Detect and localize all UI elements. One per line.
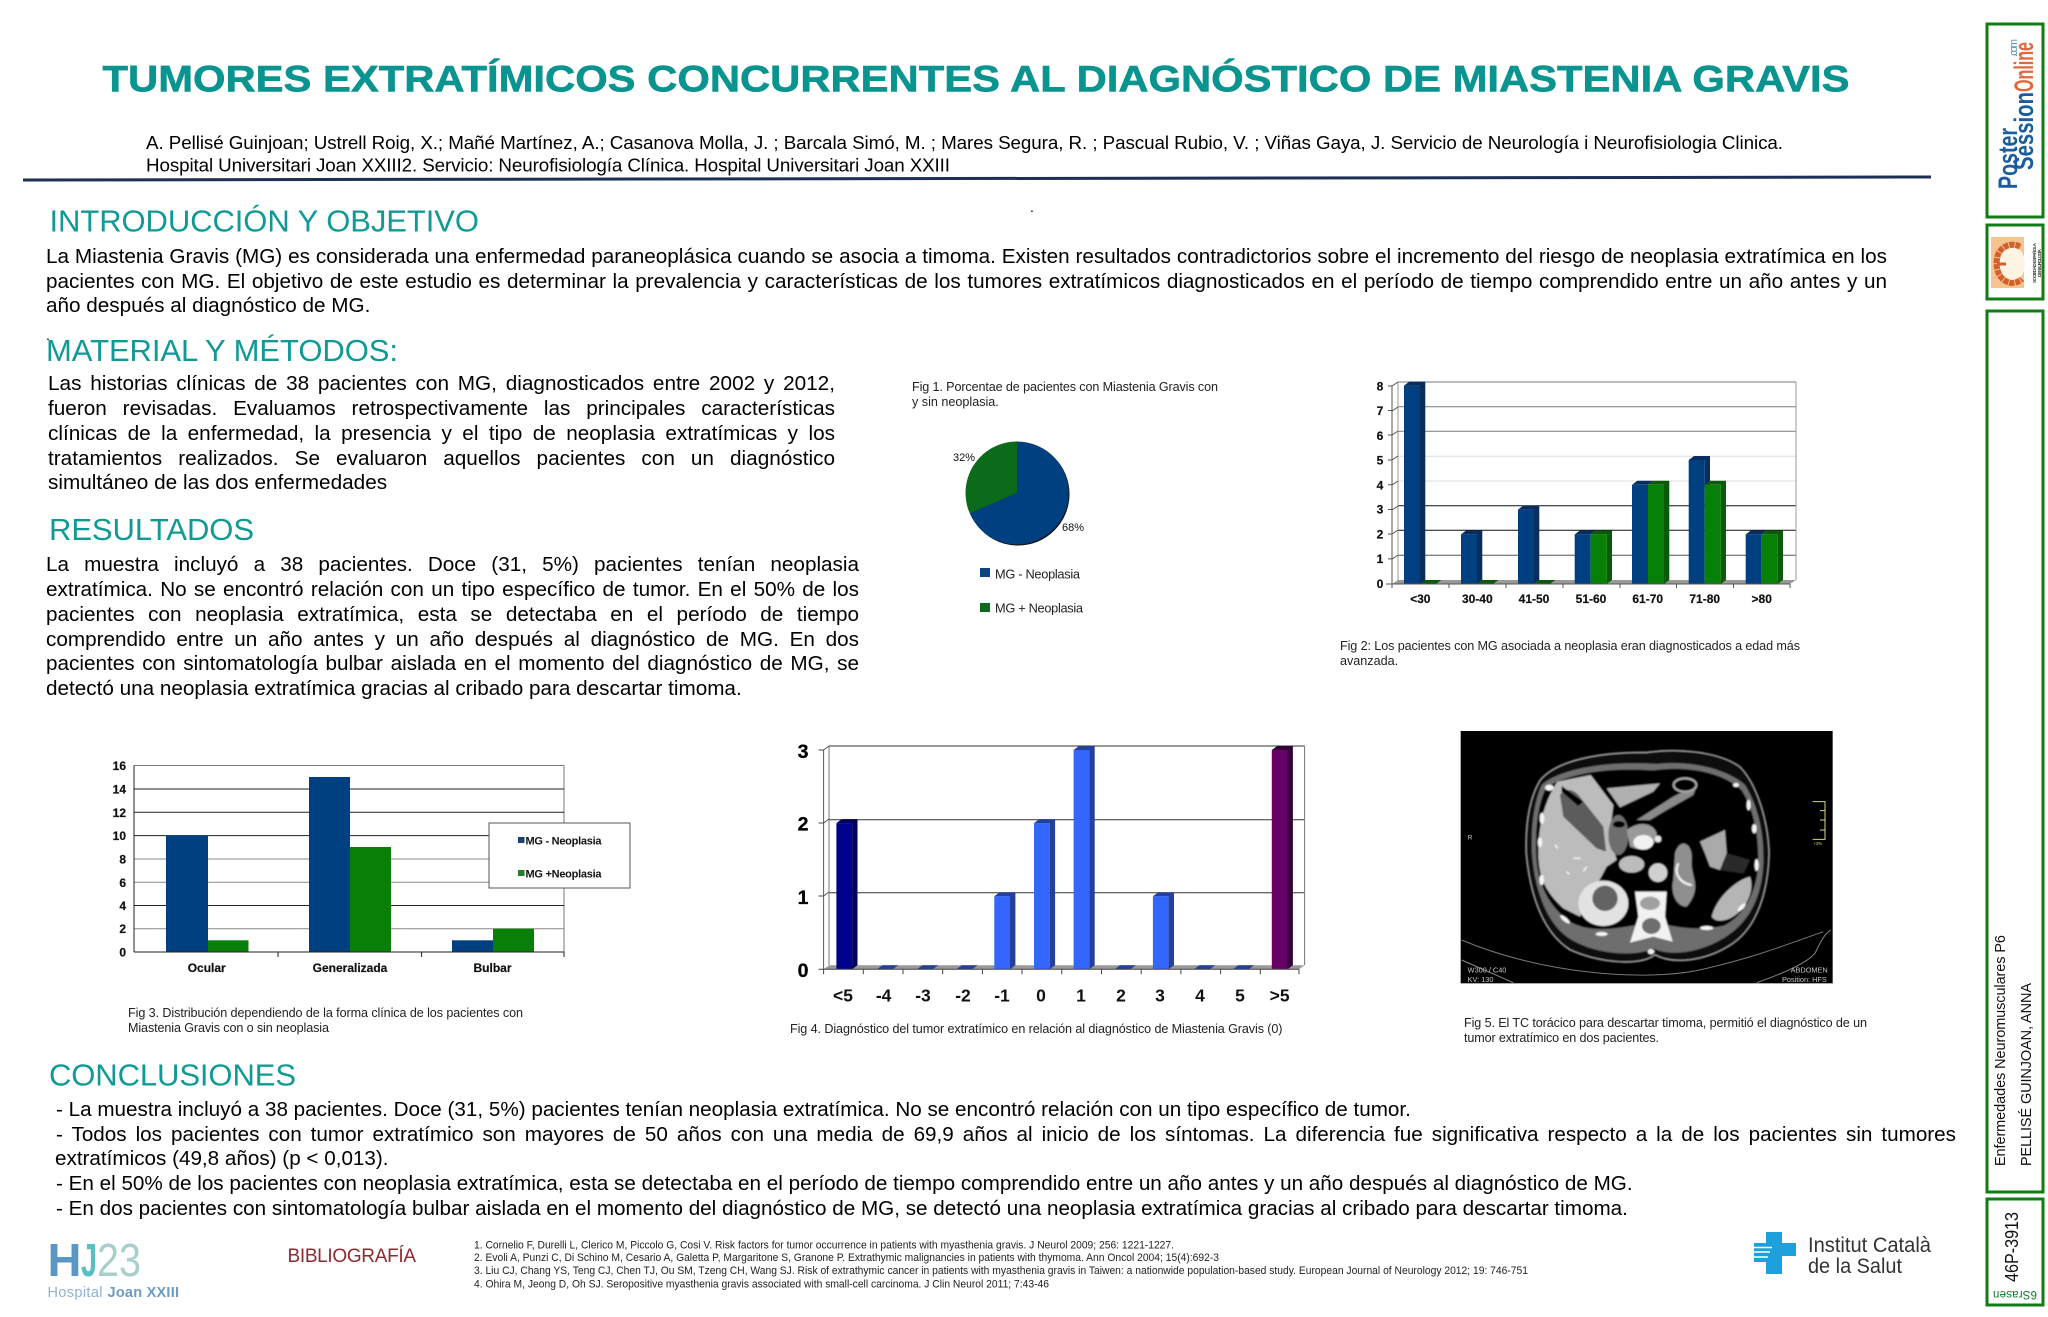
caption fig 5 [1464,1016,1867,1045]
sidebar box: PosterSessionOnline logo: Session [2009,92,2039,170]
legend fig 1 [980,566,1084,616]
x axis labels: >5 [1270,986,1290,1006]
caption fig 4: Fig 4. Diagnóstico del tumor extratímico en relación al diagnóstico de Miastenia Gravis (0) [790,1022,1282,1036]
caption fig 1: y sin neoplasia. [912,395,999,409]
text: resultados [46,553,859,700]
figure 1: pie chart [912,380,1218,616]
y axis labels [798,741,809,982]
figure 5: CT scan: ABDOMEN [1791,966,1828,975]
heading: introducción y objetivo: INTRODUCCIÓN Y OBJETIVO [50,204,479,238]
sidebar box: PosterSessionOnline logo: .com [2008,39,2020,57]
text: . [1030,199,1034,215]
x axis labels: 0 [1036,986,1046,1006]
x axis labels: -2 [955,986,971,1006]
y axis labels: 12 [113,806,126,820]
sidebar box: poster code: 46P-3913 [2002,1212,2022,1282]
text: conclusiones: - Todos los pacientes con tumor extratímico son mayores de 50 años con una media de 69,9 años al inicio de los síntomas. La diferencia fue significativa respecto a la de los pacientes sin tumores [56,1123,1956,1146]
x axis labels: Ocular [188,961,226,975]
x axis labels: <5 [833,986,853,1006]
figure 5: CT scan [1461,731,1867,1045]
y axis labels [113,759,126,960]
text: introducción [46,244,1887,317]
text: references: 3. Liu CJ, Chang YS, Teng CJ, Chen TJ, Ou SM, Tzeng CH, Wang SJ. Risk of extrathymic cancer in patients with myasthenia gravis in Taiwen: a nationwide population-based study. European Journal of Neurology 2012; 19: 746-751 [474,1265,1528,1277]
y axis labels: 3 [1377,502,1384,516]
text: introducción: año después al diagnóstico de MG. [46,294,370,317]
legend fig 1: MG - Neoplasia [995,566,1081,582]
y axis labels: 8 [119,852,126,866]
y axis labels: 8 [1377,380,1384,394]
heading: resultados: RESULTADOS [49,512,254,547]
x axis labels: -1 [994,986,1010,1006]
y axis labels: 3 [798,741,809,763]
x axis labels: Bulbar [473,961,512,975]
figure 5: CT scan: W300 / C40 [1468,966,1506,975]
x axis labels: 51-60 [1576,592,1607,606]
figure 5: CT scan: +3% [1813,841,1822,846]
x axis labels: 61-70 [1632,592,1663,606]
blue bars [1404,382,1767,584]
text: material y métodos: simultáneo de las dos enfermedades [48,471,387,494]
sidebar box: session and author [1987,311,2043,1192]
text: material y métodos [48,372,835,494]
y axis labels: 2 [798,814,809,836]
authors: Hospital Universitari Joan XXIII2. Servicio: Neurofisiología Clínica. Hospital Universitari Joan XXIII [146,154,950,176]
x axis labels: 5 [1235,986,1245,1006]
text: conclusiones: extratímicos (49,8 años) (p < 0,013). [55,1147,389,1170]
caption fig 1: Fig 1. Porcentae de pacientes con Miastenia Gravis con [912,380,1218,394]
text: material y métodos: tratamientos realizados. Se evaluaron aquellos pacientes con un diagnóstico [48,446,835,470]
legend fig 1: MG + Neoplasia [995,600,1084,616]
text: resultados: pacientes con neoplasia extratímica, esta se detectaba en el período de tiempo [46,602,859,626]
caption fig 1 [912,380,1218,409]
x axis labels [833,986,1290,1006]
y axis labels: 16 [113,759,126,773]
text: resultados: extratímica. No se encontró relación con un tipo específico de tumor. En el 50% de los [46,578,859,601]
sidebar box: PosterSessionOnline logo [1987,24,2043,217]
pie: 68% [1062,522,1084,534]
figure 5: CT scan: R [1468,834,1473,841]
y axis labels: 14 [113,782,126,796]
text: conclusiones: - En el 50% de los pacientes con neoplasia extratímica, esta se detectaba en el período de tiempo comprendido entre un año antes y un año después al diagnóstico de MG. [56,1172,1633,1195]
text: resultados: comprendido entre un año antes y un año después al diagnóstico de MG. En dos [46,628,859,650]
bars [166,777,534,952]
y axis labels: 2 [1377,528,1384,542]
y axis labels: 6 [119,876,126,890]
figure 5: CT scan: KV: 130 [1468,975,1493,984]
x axis labels: >80 [1752,592,1772,606]
title: TUMORES EXTRATÍMICOS CONCURRENTES AL DIAGNÓSTICO DE MIASTENIA GRAVIS [102,58,1850,100]
x axis labels: 3 [1155,986,1165,1006]
logo: Hospital Joan XXIII: Hospital [48,1285,102,1301]
x axis labels [188,961,512,975]
y axis labels: 4 [119,899,126,913]
text: material y métodos: Las historias clínicas de 38 pacientes con MG, diagnosticados entre 2002 y 2012, [48,372,835,395]
y axis labels: 2 [119,922,126,936]
caption fig 2: avanzada. [1340,654,1398,668]
x axis labels: 71-80 [1689,592,1720,606]
text: conclusiones: - La muestra incluyó a 38 pacientes. Doce (31, 5%) pacientes tenían neoplasia extratímica. No se encontró relación con un tipo específico de tumor. [56,1098,1411,1121]
heading: conclusiones: CONCLUSIONES [49,1058,296,1092]
caption fig 3: Fig 3. Distribución dependiendo de la forma clínica de los pacientes con [128,1006,523,1020]
x axis labels [1410,592,1772,606]
heading: bibliografía: BIBLIOGRAFÍA [288,1246,416,1267]
y axis labels: 6 [1377,429,1384,443]
sidebar box: PosterSessionOnline logo: Online [2009,42,2039,92]
text: introducción: pacientes con MG. El objetivo de este estudio es determinar la prevalencia y características de los tumores extratímicos diagnosticados en el período de tiempo comprendido entre un año antes y un [46,270,1887,292]
text: material y métodos: fueron revisadas. Evaluamos retrospectivamente las principales características [48,397,835,420]
legend fig 3: MG - Neoplasia [526,836,602,848]
x axis labels: -3 [915,986,931,1006]
legend fig 3: MG +Neoplasia [526,868,602,880]
text: resultados: detectó una neoplasia extratímica gracias al cribado para descartar timoma. [46,677,742,700]
figure 2: age bar chart [1340,380,1800,668]
x axis labels: -4 [876,986,892,1006]
figure 5: CT scan: Position: HFS [1782,975,1827,984]
text: references: 4. Ohira M, Jeong D, Oh SJ. Seropositive myasthenia gravis associated with small-cell carcinoma. J Clin Neurol 2011; 7:43-46 [474,1278,1049,1290]
heading: material y métodos: MATERIAL Y MÉTODOS: [46,333,398,368]
sidebar box: Sociedad Española de Neurología logo [1987,225,2043,299]
legend fig 3 [489,823,630,888]
green bars [1420,481,1783,584]
text: references [474,1240,1528,1290]
text: introducción: La Miastenia Gravis (MG) es considerada una enfermedad paraneoplásica cuando se asocia a timoma. Existen resultados contradictorios sobre el incremento del riesgo de neoplasia extratímica en los [46,244,1887,268]
x axis labels: 30-40 [1462,592,1493,606]
y axis labels: 7 [1377,404,1384,418]
figure 4: timing bar chart [790,741,1305,1036]
pie: 32% [953,452,975,464]
sidebar box: PosterSessionOnline logo: Poster [1993,128,2023,189]
figure 3: clinical form bar chart [113,759,630,1035]
sidebar box: session and author: PELLISÉ GUINJOAN, ANNA [2018,983,2035,1166]
authors [146,132,1783,176]
text: material y métodos: clínicas de la enfermedad, la presencia y el tipo de neoplasia extratímicas y los [48,422,835,444]
pie [953,442,1084,546]
bars [836,746,1293,969]
y axis labels: 0 [119,946,126,960]
text: conclusiones [55,1098,1956,1220]
logo: Hospital Joan XXIII: J [81,1234,97,1286]
x axis labels: 41-50 [1519,592,1550,606]
x axis labels: Generalizada [313,961,388,975]
logo: Institut Català de la Salut [1754,1232,1931,1278]
y axis labels: 4 [1377,478,1384,492]
y axis labels [1377,380,1384,591]
caption fig 3: Miastenia Gravis con o sin neoplasia [128,1021,329,1035]
text: references: 2. Evoli A, Punzi C, Di Schino M, Cesario A, Galetta P, Margaritone S, Granone P. Extrathymic malignancies in patients with thymoma. Ann Oncol 2004; 15(4):692-3 [474,1252,1219,1264]
y axis labels: 10 [113,829,126,843]
y axis labels: 1 [1377,552,1384,566]
authors: A. Pellisé Guinjoan; Ustrell Roig, X.; Mañé Martínez, A.; Casanova Molla, J. ; Barcala Simó, M. ; Mares Segura, R. ; Pascual Rubio, V. ; Viñas Gaya, J. Servicio de Neurología i Neurofisiologia Clinica. [146,132,1783,153]
x axis labels: 4 [1195,986,1205,1006]
logo: Hospital Joan XXIII: Joan XXIII [108,1285,179,1301]
caption fig 3 [128,1006,523,1035]
sidebar box: poster code: 6Srasen [1993,1288,2037,1300]
text: resultados: La muestra incluyó a 38 pacientes. Doce (31, 5%) pacientes tenían neoplasia [46,553,859,576]
y axis labels: 5 [1377,454,1384,468]
x axis labels: 2 [1116,986,1126,1006]
logo: Hospital Joan XXIII: H [48,1234,82,1286]
logo: Hospital Joan XXIII [48,1234,179,1301]
y axis labels: 1 [798,887,809,909]
text: conclusiones: - En dos pacientes con sintomatología bulbar aislada en el momento del diagnóstico de MG, se detectó una neoplasia extratímica gracias al cribado para descartar timoma. [56,1197,1628,1220]
text: . [46,327,50,343]
x axis labels: 1 [1076,986,1086,1006]
text: references: 1. Cornelio F, Durelli L, Clerico M, Piccolo G, Cosi V. Risk factors for tumor occurrence in patients with myasthenia gravis. J Neurol 2009; 256: 1221-1227. [474,1240,1174,1252]
sidebar box: Sociedad Española de Neurología logo: DE NEUROLOGÍA [2035,248,2042,277]
sidebar box: session and author: Enfermedades Neuromusculares P6 [1993,935,2009,1166]
sidebar box: Sociedad Española de Neurología logo: SOCIEDAD ESPAÑOLA [2031,242,2037,283]
caption fig 2: Fig 2: Los pacientes con MG asociada a neoplasia eran diagnosticados a edad más [1340,639,1800,653]
logo: Institut Català de la Salut: Institut Català [1808,1234,1931,1257]
caption fig 5: Fig 5. El TC torácico para descartar timoma, permitió el diagnóstico de un [1464,1016,1867,1030]
caption fig 2 [1340,639,1800,668]
caption fig 5: tumor extratímico en dos pacientes. [1464,1031,1659,1045]
zero bars [877,965,1254,969]
y axis labels: 0 [798,960,809,982]
sidebar box: poster code [1987,1199,2043,1305]
text: resultados: pacientes con sintomatología bulbar aislada en el momento del diagnóstico de MG, se [46,652,859,675]
y axis labels: 0 [1377,577,1384,591]
logo: Hospital Joan XXIII: 23 [97,1234,141,1286]
logo: Institut Català de la Salut: de la Salut [1808,1255,1902,1278]
x axis labels: <30 [1410,592,1431,606]
